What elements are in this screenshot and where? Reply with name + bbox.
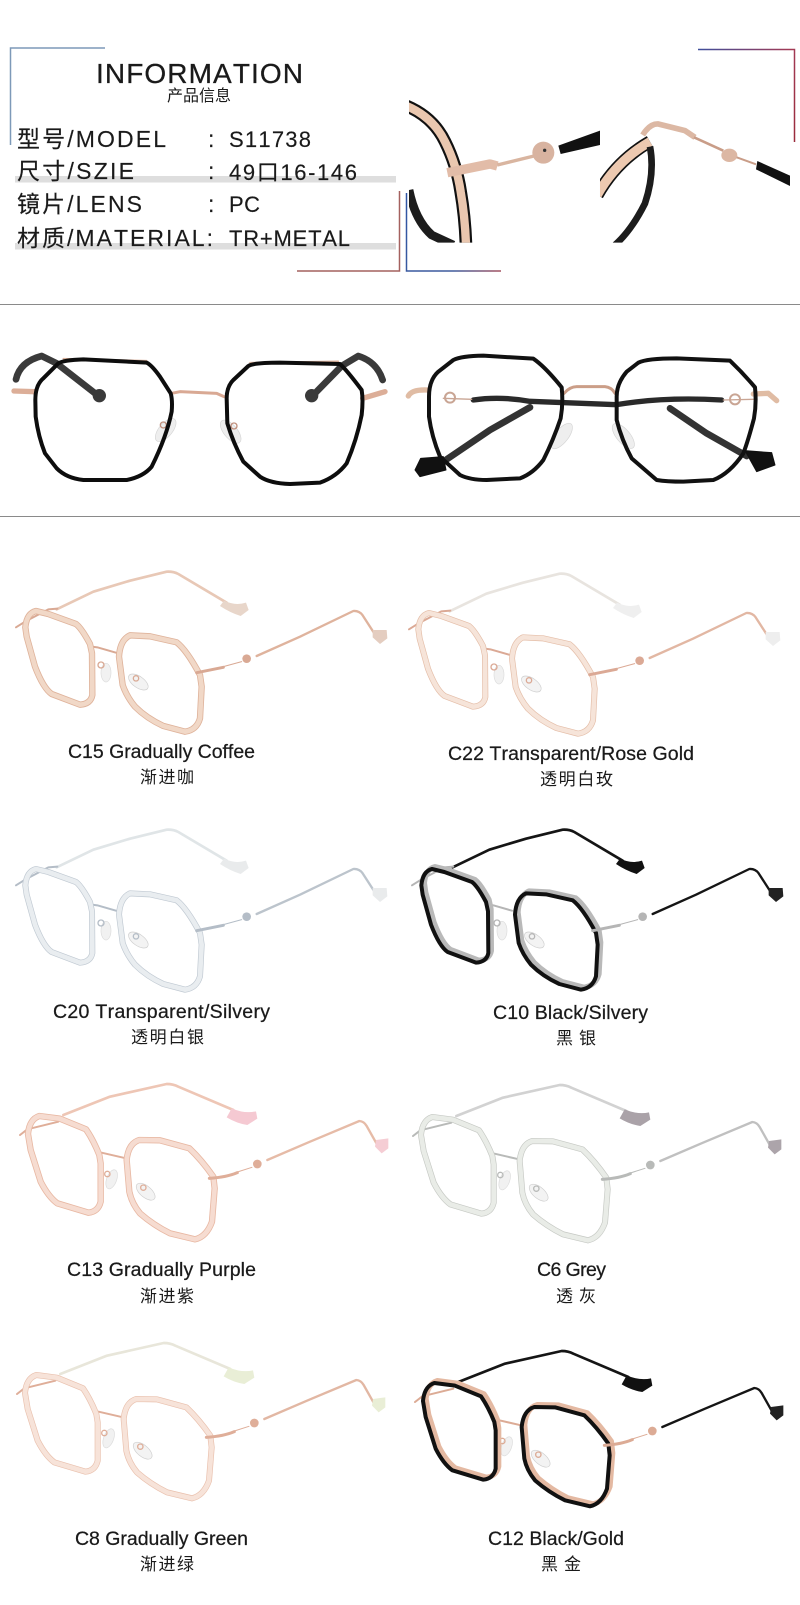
label: C22 [448,743,694,789]
label: C8 [75,1528,248,1574]
label: C15 [68,741,255,787]
colourway: C13 glasses [20,1084,388,1239]
spec: lens: PC [229,192,260,217]
spec: lens: : [208,191,214,217]
label: C15: C15 Gradually Coffee [68,741,255,763]
spec: model: S11738 [229,127,311,152]
colourway: C12 glasses [415,1351,783,1506]
colourway: C6 glasses [413,1085,781,1240]
label: C22: C22 Transparent/Rose Gold [448,743,694,765]
label: C20: C20 Transparent/Silvery [53,1001,270,1023]
band: highlight under material row [15,243,396,250]
spec: material [17,225,350,251]
label: C10: C10 Black/Silvery [493,1002,648,1024]
label: C15: 渐进咖 [140,768,194,787]
label: C13: 渐进紫 [140,1287,194,1306]
colourway: C10 glasses [412,830,783,990]
title: INFORMATION [96,58,303,89]
divider [0,304,800,305]
corner frame: top right [698,50,794,142]
label: C6 [537,1259,606,1306]
corner frame: blue top-left [10,48,105,145]
spec: material: TR+METAL [229,226,350,251]
spec: model: : [208,126,214,152]
label: C12: C12 Black/Gold [488,1528,624,1550]
spec: lens [17,191,260,217]
spec rows [17,126,357,251]
colourway: C15 glasses [16,572,387,732]
label: C22: 透明白玫 [540,770,613,789]
label: C13: C13 Gradually Purple [67,1259,256,1281]
front view glasses [14,356,385,484]
label: C10: 黑 银 [556,1029,596,1048]
corner frame: blue lower-middle [406,193,501,271]
label: C12 [488,1528,624,1574]
spec: size: 尺寸/SZIE [17,158,134,184]
label: C12: 黑 金 [541,1555,581,1574]
spec: size: 49口16-146 [229,160,357,185]
spec: size: : [208,158,214,184]
subtitle: 产品信息 [167,87,231,105]
folded view glasses [408,356,777,482]
spec: model [17,126,311,152]
label: C8: 渐进绿 [140,1555,194,1574]
label: C6: C6 Grey [537,1259,606,1281]
label: C6: 透 灰 [556,1287,596,1306]
detail photo: hinge left [407,106,600,245]
label: C20: 透明白银 [131,1028,204,1047]
label: C10 [493,1002,648,1048]
divider [0,516,800,517]
colourway: C22 glasses [409,574,780,734]
spec: lens: 镜片/LENS [17,191,142,217]
colourway: C8 glasses [17,1343,385,1498]
spec: material: 材质/MATERIAL: [17,225,213,251]
band: highlight under size row [15,176,396,182]
spec: model: 型号/MODEL [17,126,166,152]
colourway: C20 glasses [16,830,387,990]
label: C13 [67,1259,256,1306]
spec: size [17,158,357,185]
detail photo: hinge right [597,124,790,245]
corner frame: red lower-left panel [297,191,400,271]
label: C20 [53,1001,270,1047]
label: C8: C8 Gradually Green [75,1528,248,1550]
